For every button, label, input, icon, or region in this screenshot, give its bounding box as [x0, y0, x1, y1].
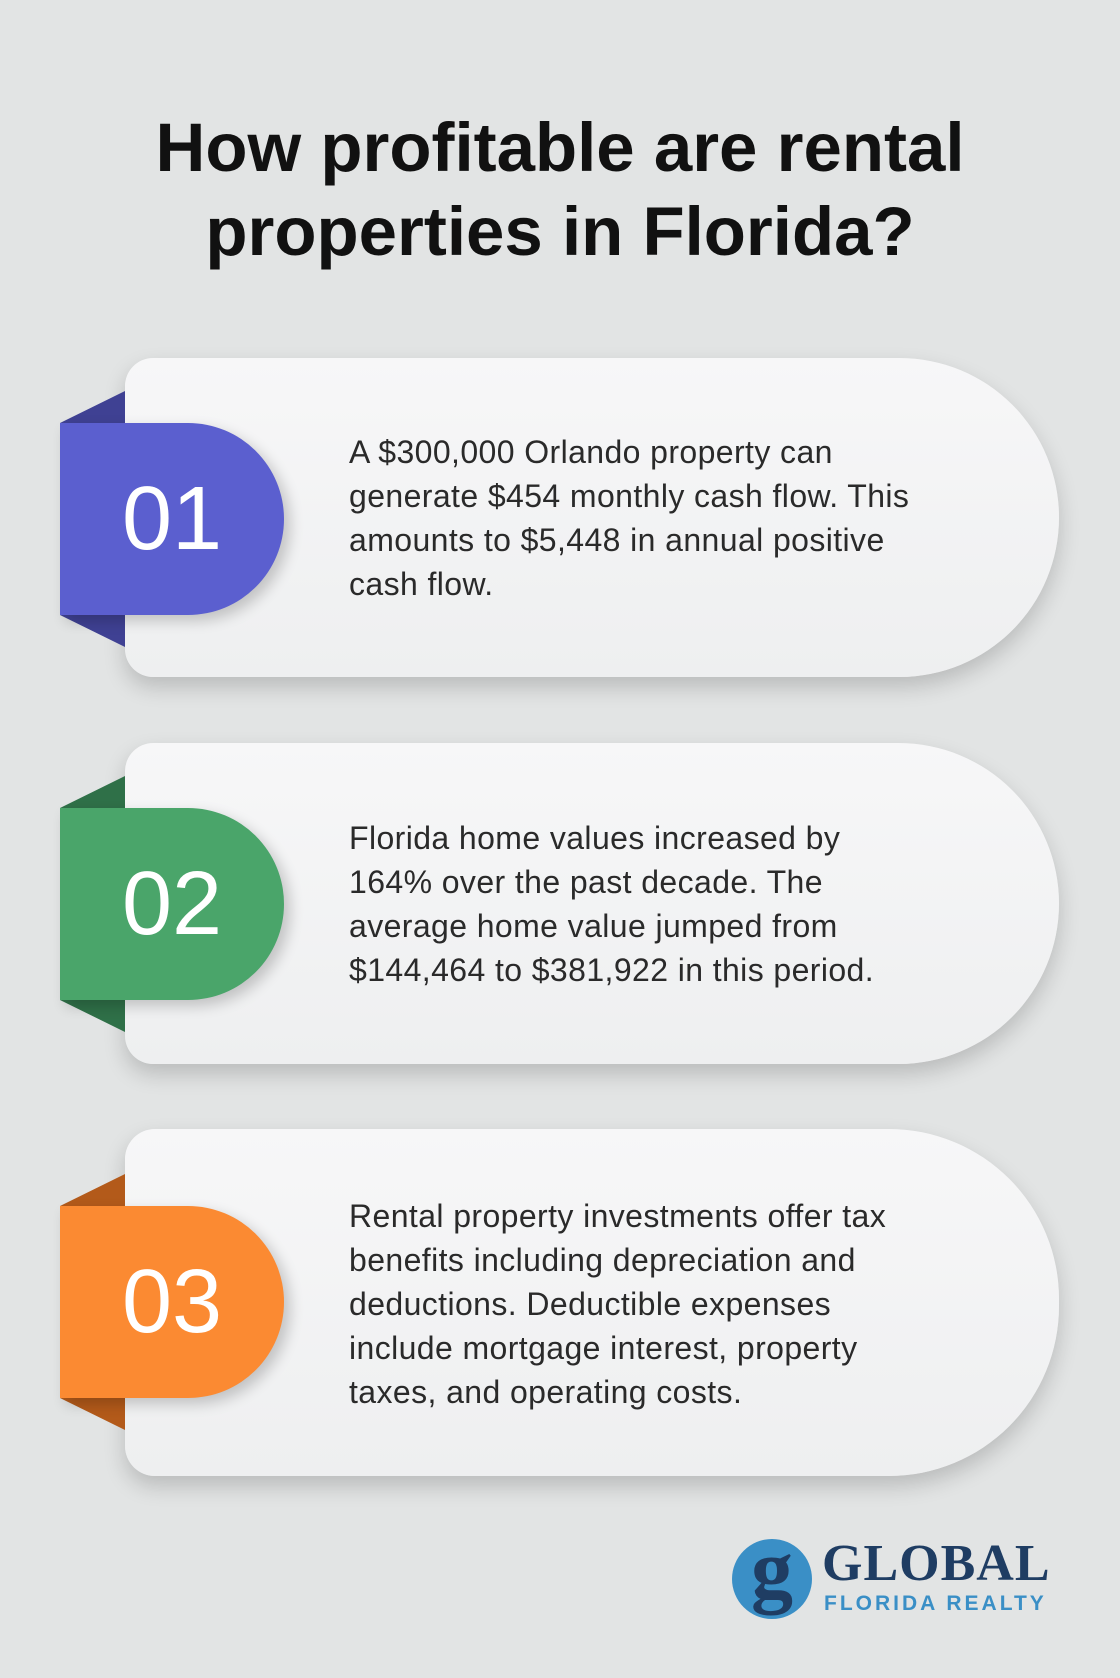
- number tab 02: [60, 808, 284, 1000]
- title: properties in Florida?: [205, 193, 915, 270]
- fold bottom 3: [60, 1398, 125, 1430]
- text 3: deductions. Deductible expenses: [349, 1286, 831, 1322]
- text 1: A $300,000 Orlando property can: [349, 434, 833, 470]
- text 2: $144,464 to $381,922 in this period.: [349, 952, 874, 988]
- text 2: [349, 820, 874, 988]
- fold top 2: [60, 776, 125, 808]
- panel: card 3: [125, 1129, 1059, 1476]
- number tab 01: 01: [122, 469, 222, 569]
- number tab 03: [60, 1206, 284, 1398]
- number tab 03: 03: [122, 1252, 222, 1352]
- number tab 02: 02: [122, 854, 222, 954]
- text 3: benefits including depreciation and: [349, 1242, 856, 1278]
- icon: logo circle: [732, 1539, 812, 1619]
- logo text: GLOBAL: [822, 1535, 1050, 1592]
- text 3: include mortgage interest, property: [349, 1330, 857, 1366]
- panel: card 1: [125, 358, 1059, 677]
- fold top 3: [60, 1174, 125, 1206]
- fold top 1: [60, 391, 125, 423]
- text 3: taxes, and operating costs.: [349, 1374, 742, 1410]
- fold bottom 1: [60, 615, 125, 647]
- number tab 01: [60, 423, 284, 615]
- text 2: 164% over the past decade. The: [349, 864, 823, 900]
- text 1: generate $454 monthly cash flow. This: [349, 478, 909, 514]
- text 3: Rental property investments offer tax: [349, 1198, 886, 1234]
- icon: logo circle: g: [751, 1523, 793, 1616]
- title: [156, 109, 964, 270]
- text 1: [349, 434, 909, 602]
- fold bottom 2: [60, 1000, 125, 1032]
- text 2: Florida home values increased by: [349, 820, 840, 856]
- text 2: average home value jumped from: [349, 908, 838, 944]
- text 1: amounts to $5,448 in annual positive: [349, 522, 885, 558]
- title: How profitable are rental: [156, 109, 964, 186]
- logo: FLORIDA REALTY: [824, 1592, 1047, 1615]
- text 3: [349, 1198, 886, 1410]
- panel: card 2: [125, 743, 1059, 1064]
- text 1: cash flow.: [349, 566, 494, 602]
- logo: [732, 1523, 1050, 1619]
